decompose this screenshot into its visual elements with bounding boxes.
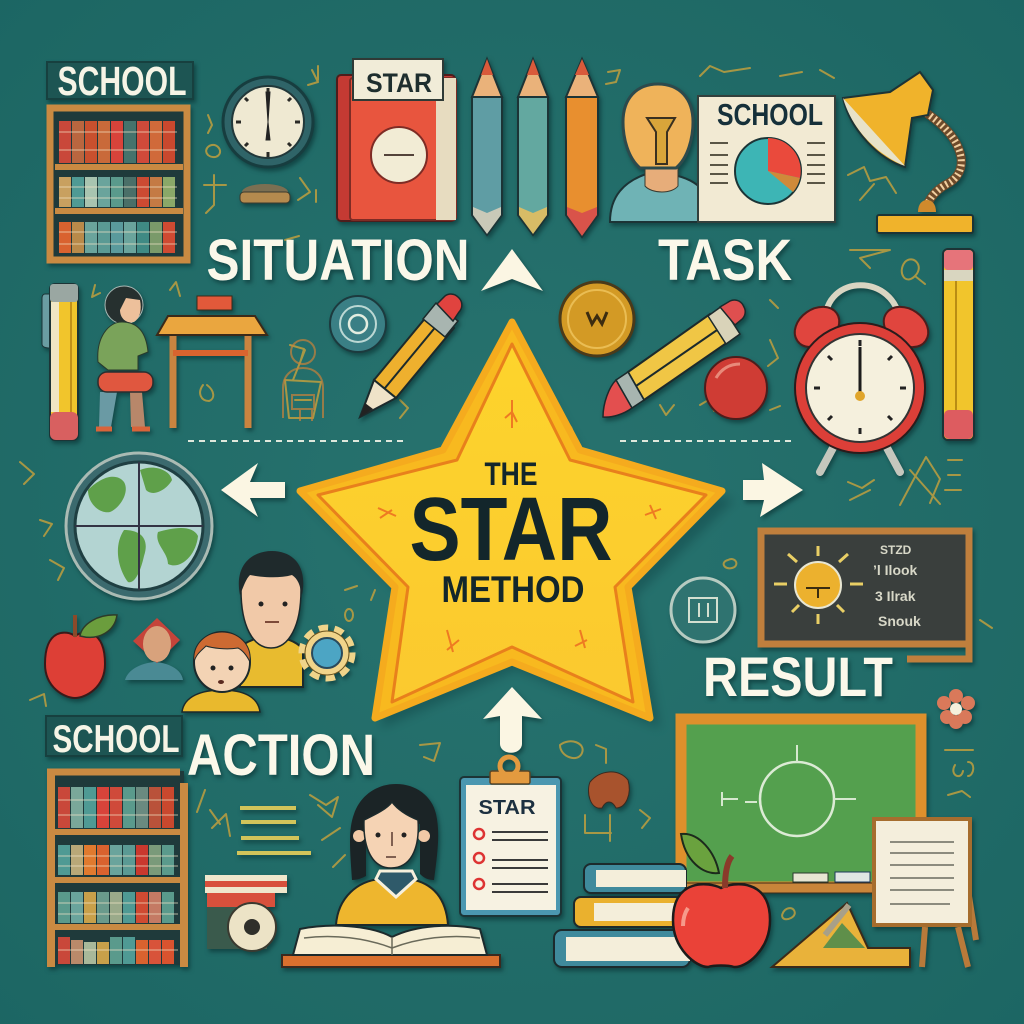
title: the star method: THE [484, 456, 538, 492]
icon: big red apple [673, 834, 770, 967]
icon: brown knot [588, 772, 629, 808]
icon: pencil diagonal right [603, 300, 745, 417]
icon: target circle [330, 296, 386, 352]
panel: task [610, 72, 973, 293]
icon: red apple left [45, 615, 117, 698]
icon: alarm clock [787, 285, 936, 472]
icon: gold coin [560, 282, 634, 356]
icon: reading student [282, 784, 500, 967]
heading: result: RESULT [703, 645, 893, 708]
small blackboard: 3 Ilrak [875, 588, 916, 604]
icon: clipboard checklist [460, 757, 561, 916]
heading: situation: SITUATION [206, 228, 470, 293]
panel: action [45, 453, 629, 967]
bookshelf bottom left [47, 769, 184, 967]
icon: gear [303, 629, 351, 677]
pie chart [735, 138, 801, 204]
school sign top left: SCHOOL [58, 58, 186, 104]
icon: group of students [125, 551, 351, 712]
green chalkboard [680, 719, 921, 893]
central star [300, 322, 734, 728]
small blackboard: ’l Ilook [873, 562, 918, 578]
icon: flower [937, 689, 975, 729]
title: the star method: STAR [410, 480, 612, 580]
title: the star method [410, 456, 612, 610]
icon: yellow pencil left [42, 284, 78, 440]
small framed icon [671, 578, 735, 642]
small blackboard: STZD [880, 543, 912, 557]
arrow left [221, 463, 285, 517]
heading: action: ACTION [187, 723, 375, 788]
panel: result [554, 531, 976, 967]
arrow up [481, 249, 543, 291]
icon: easel note [874, 819, 976, 967]
school sign bottom left: SCHOOL [52, 718, 180, 761]
heading: task: TASK [658, 228, 792, 293]
icon: small eraser [240, 184, 290, 203]
icon: star book: STAR [366, 68, 432, 98]
small blackboard [761, 531, 969, 659]
chalk doodles [20, 66, 992, 919]
list lines icon [237, 808, 311, 853]
icon: globe [66, 453, 212, 599]
icon: book with badge [205, 875, 287, 951]
icon: yellow pencil right [943, 249, 974, 440]
icon: pencil diagonal left [360, 294, 462, 417]
faint figure [283, 340, 323, 421]
icon: wall clock [223, 77, 313, 167]
arrow up lower [483, 687, 542, 753]
icon: star book [337, 59, 456, 221]
chart document: SCHOOL [717, 97, 823, 132]
arrow right [743, 463, 803, 517]
title: the star method: METHOD [442, 569, 584, 610]
icon: pencils [472, 59, 598, 237]
icon: book stack [554, 864, 690, 967]
panel: upper left classroom [42, 282, 767, 440]
icon: student at desk [96, 286, 267, 429]
icon: clipboard checklist: STAR [478, 797, 536, 819]
icon: desk lamp [843, 72, 973, 233]
small blackboard: Snouk [878, 613, 921, 629]
panel: situation [47, 58, 598, 293]
icon: lightbulb person [610, 84, 716, 222]
icon: red ball [705, 357, 767, 419]
icon: set square ruler [772, 903, 910, 967]
chart document [698, 96, 835, 222]
bookshelf top left [50, 108, 187, 260]
